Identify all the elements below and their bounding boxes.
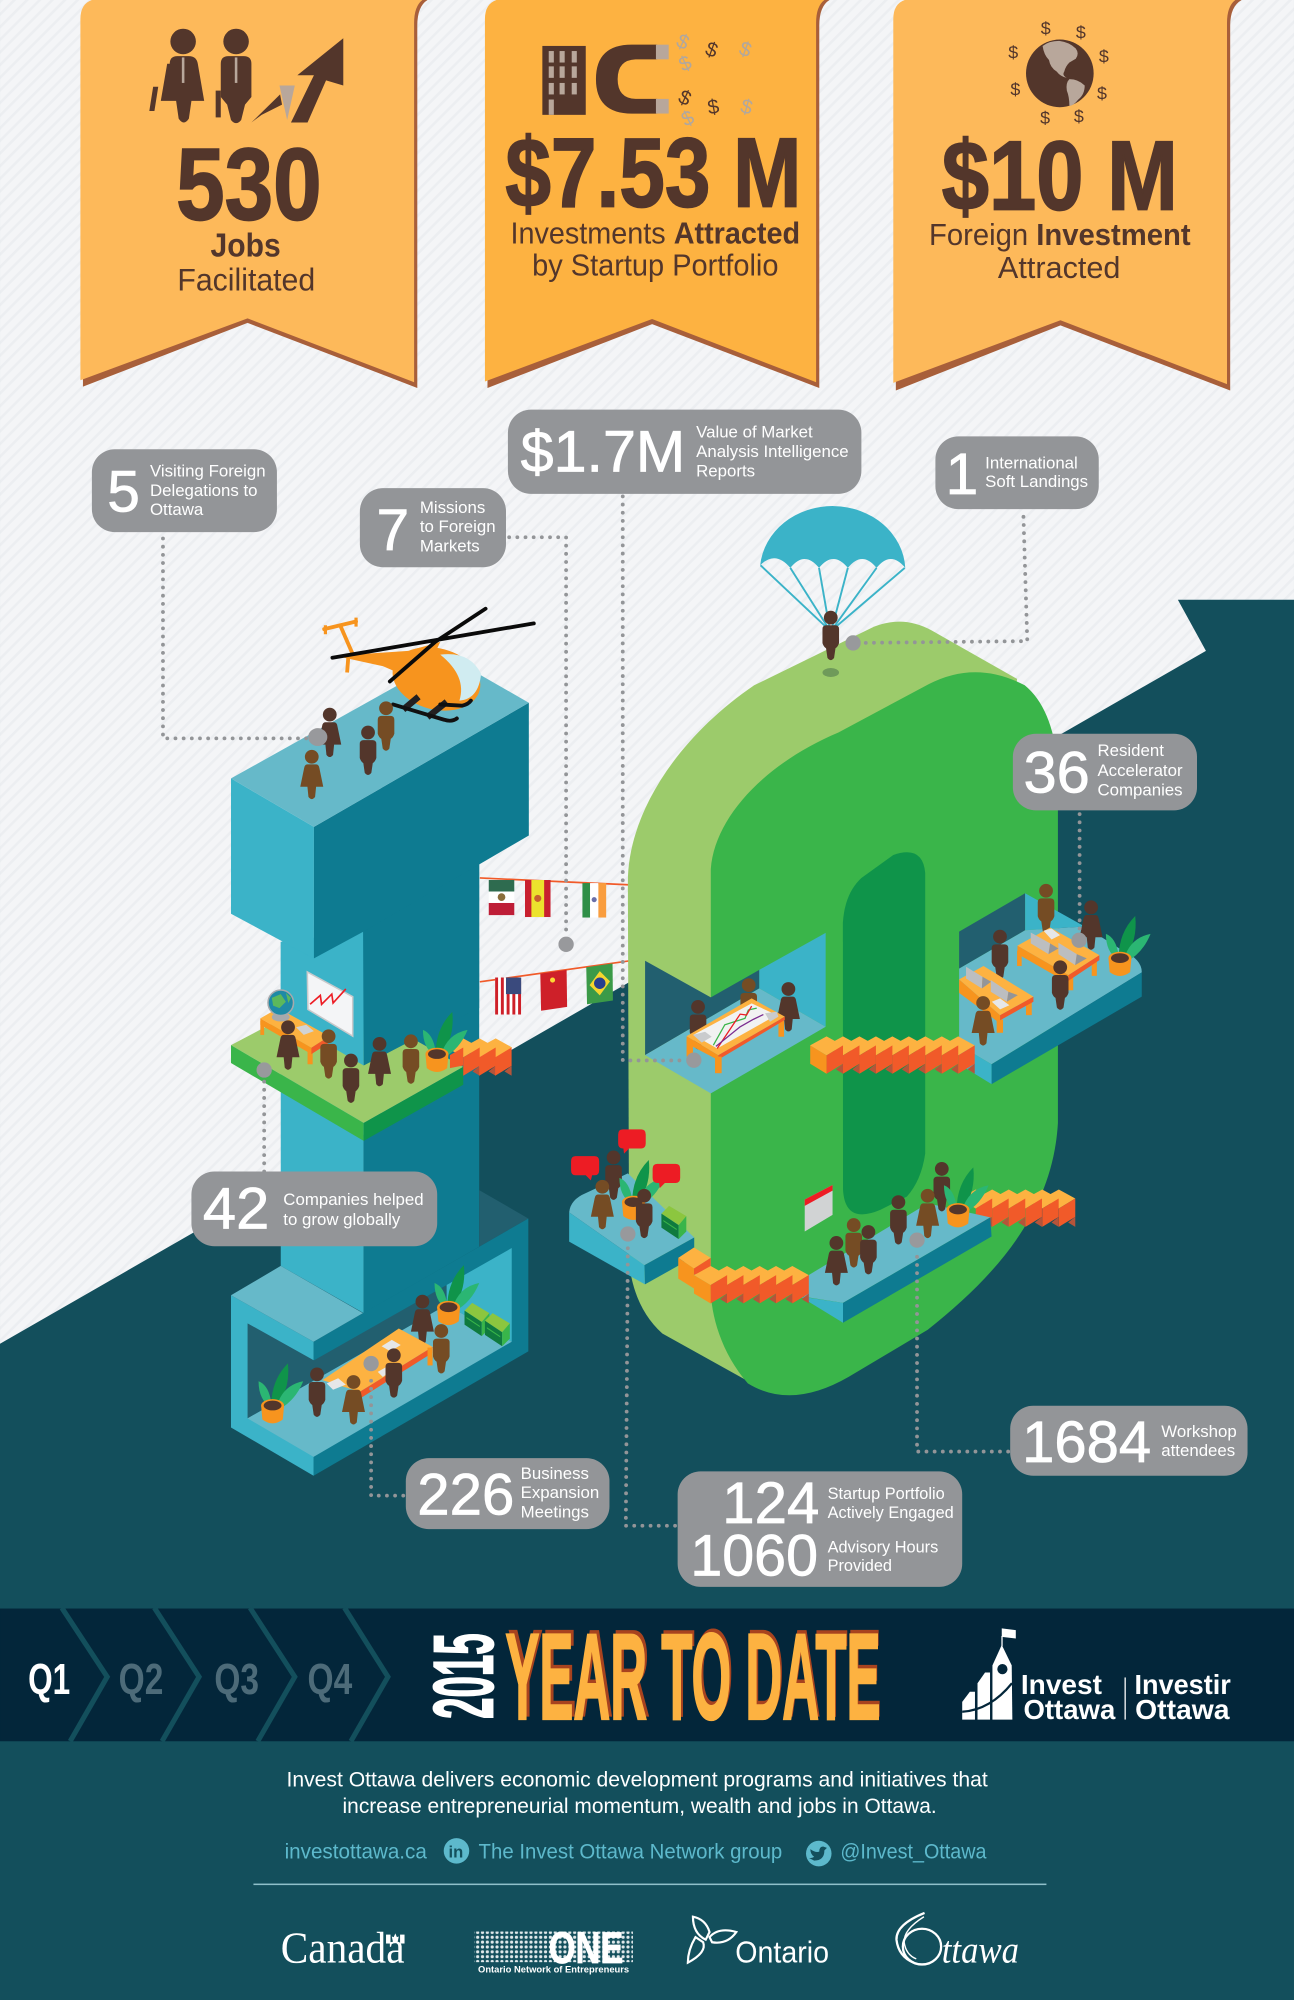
contact links: @Invest_Ottawa xyxy=(840,1841,987,1864)
callout: 7 missions: Missions xyxy=(420,498,485,517)
callout: 1 soft landing: Soft Landings xyxy=(985,472,1088,491)
quarter labels xyxy=(28,1656,352,1704)
callout: 226 meetings xyxy=(406,1458,609,1529)
callout: 36 companies: Accelerator xyxy=(1097,761,1183,780)
stairs left of workshop xyxy=(678,1248,809,1304)
callout: 1684 attendees xyxy=(1010,1406,1248,1476)
callout: 5 delegations: Delegations to xyxy=(150,481,258,500)
desk with globe xyxy=(260,990,329,1064)
stem xyxy=(281,855,479,1313)
label: investments attracted by startup portfolio: Investments Attracted xyxy=(510,217,800,251)
isometric numeral zero xyxy=(569,506,1151,1395)
logo: ONE: ONE xyxy=(549,1924,623,1973)
isometric numeral one xyxy=(231,609,534,1476)
callout: 36 companies: Resident xyxy=(1097,741,1164,760)
icon: globe with dollars: $ xyxy=(1008,43,1018,63)
callout: 1684 attendees: Workshop xyxy=(1161,1422,1237,1441)
icon: building and magnet attracting dollars: $ xyxy=(673,30,693,55)
parachute with person xyxy=(760,506,905,677)
dotted leader lines xyxy=(163,496,1080,1526)
icon: building and magnet attracting dollars xyxy=(542,30,755,131)
callout: 7 missions xyxy=(360,488,506,567)
leader end dots xyxy=(257,635,1087,1371)
zero side face xyxy=(628,622,1017,1391)
callout: 7 missions: Markets xyxy=(420,536,480,555)
callout: $1.7M: $1.7M xyxy=(521,420,685,485)
meeting table xyxy=(322,1328,433,1399)
logo: Ottawa xyxy=(896,1913,1019,1972)
callout: 42 companies: 42 xyxy=(203,1176,269,1241)
callout: 36 companies xyxy=(1013,734,1197,810)
flag: China xyxy=(540,970,567,1011)
ribbon: foreign investment xyxy=(893,0,1242,390)
icon: globe with dollars: $ xyxy=(1076,22,1086,42)
people on top of the one xyxy=(300,701,394,799)
flag: Spain xyxy=(525,880,551,917)
icon: building and magnet attracting dollars: $ xyxy=(702,38,721,63)
icon: globe with dollars: $ xyxy=(1097,84,1107,104)
icon: building and magnet attracting dollars: $ xyxy=(678,106,698,131)
person behind table xyxy=(411,1295,434,1344)
icon: globe with dollars xyxy=(1008,18,1109,128)
people at meeting table xyxy=(309,1324,450,1424)
logo: Invest Ottawa xyxy=(962,1628,1231,1725)
icon: globe with dollars: $ xyxy=(1099,47,1109,67)
callout: 226 meetings: Meetings xyxy=(521,1502,589,1521)
plant in meeting room xyxy=(435,1265,479,1325)
whiteboard with growth chart xyxy=(307,972,353,1036)
dark teal diagonal ground xyxy=(0,600,1294,2000)
label: investments attracted by startup portfolio xyxy=(510,217,800,283)
label: jobs facilitated xyxy=(177,228,315,297)
logo: Invest Ottawa: Ottawa xyxy=(1023,1694,1116,1725)
callout: 124 and 1060: Startup Portfolio xyxy=(828,1485,945,1503)
callout: 124 and 1060: 124 xyxy=(722,1471,819,1536)
contact links: investottawa.ca xyxy=(285,1841,427,1864)
icon: globe with dollars: $ xyxy=(1041,18,1051,38)
zero front face xyxy=(711,672,1058,1395)
callout: 5 delegations xyxy=(92,449,277,532)
callout: 226 meetings: 226 xyxy=(417,1462,514,1527)
networking platform xyxy=(569,1129,694,1284)
quarter labels: Q3 xyxy=(214,1656,259,1704)
callout: 124 and 1060: Provided xyxy=(828,1557,892,1575)
top bar of the one xyxy=(231,657,529,958)
icon: building and magnet attracting dollars: $ xyxy=(736,38,755,63)
icon: people and growth arrow xyxy=(149,29,343,123)
icon: building and magnet attracting dollars: $ xyxy=(675,86,695,111)
logo: Ottawa: ttawa xyxy=(942,1930,1019,1972)
ribbon: investments attracted xyxy=(485,0,829,388)
callout: 42 companies: to grow globally xyxy=(283,1210,401,1229)
icon: building and magnet attracting dollars: $ xyxy=(738,95,755,120)
callout: 1 soft landing: International xyxy=(985,453,1078,472)
callout: $1.7M: Reports xyxy=(696,462,755,481)
description text: Invest Ottawa delivers economic development programs and initiatives that xyxy=(286,1769,988,1792)
contact links: The Invest Ottawa Network group xyxy=(479,1841,782,1864)
icon: globe with dollars: $ xyxy=(1074,107,1084,127)
callout: 1 soft landing xyxy=(935,436,1099,509)
flag: United States xyxy=(495,978,521,1015)
quarter labels: Q4 xyxy=(308,1656,352,1704)
icon: linkedin xyxy=(444,1838,469,1864)
icon: building and magnet attracting dollars: $ xyxy=(676,52,696,77)
stairs right of workshop xyxy=(959,1189,1075,1227)
callout: 5 delegations: Visiting Foreign xyxy=(150,462,266,481)
zero inner hole xyxy=(843,852,925,1214)
label: foreign investment attracted: Attracted xyxy=(998,251,1120,285)
callout: 1684 attendees: 1684 xyxy=(1022,1410,1151,1475)
callout: 124 and 1060: 1060 xyxy=(690,1523,818,1588)
big number $10 M: $10 M xyxy=(942,120,1178,230)
callout: 1 soft landing: 1 xyxy=(946,442,978,507)
logo: Ontario: Ontario xyxy=(735,1936,829,1970)
callout: 124 and 1060: Actively Engaged xyxy=(828,1504,954,1522)
plant on platform xyxy=(423,1012,468,1072)
ribbon: jobs xyxy=(80,0,428,388)
big number 530: 530 xyxy=(176,127,322,241)
quarter labels: Q1 xyxy=(28,1656,70,1704)
stairs across zero hole xyxy=(810,1036,975,1074)
accelerator room xyxy=(959,884,1151,1084)
callout: $1.7M: Analysis Intelligence xyxy=(696,442,849,461)
callout: 124 and 1060: Advisory Hours xyxy=(828,1538,938,1556)
callout: 42 companies: Companies helped xyxy=(283,1190,424,1209)
logo: Ontario xyxy=(688,1917,829,1970)
callout: $1.7M: Value of Market xyxy=(696,423,813,442)
icon: twitter xyxy=(806,1841,832,1866)
analysis room xyxy=(645,933,826,1093)
description text: increase entrepreneurial momentum, wealth and jobs in Ottawa. xyxy=(343,1795,937,1818)
callout: 124 and 1060 xyxy=(678,1471,962,1588)
big number $7.53 M: $7.53 M xyxy=(505,118,801,228)
callout: 5 delegations: 5 xyxy=(107,460,140,525)
logo: ONE xyxy=(474,1924,633,1975)
flag: Mexico xyxy=(489,880,514,915)
callout: 42 companies xyxy=(191,1171,437,1246)
label: foreign investment attracted: Foreign Investment xyxy=(929,218,1191,252)
workshop platform xyxy=(800,1162,992,1323)
label: investments attracted by startup portfolio: by Startup Portfolio xyxy=(532,249,778,283)
callout: 1684 attendees: attendees xyxy=(1161,1441,1235,1460)
flag: Brazil xyxy=(586,963,613,1004)
flag: India xyxy=(582,883,606,918)
logo: ONE: Ontario Network of Entrepreneurs xyxy=(478,1965,629,1975)
callout: 5 delegations: Ottawa xyxy=(150,500,204,519)
label: jobs facilitated: Facilitated xyxy=(177,261,315,297)
icon: globe with dollars: $ xyxy=(1040,108,1050,128)
quarter labels: Q2 xyxy=(119,1656,163,1704)
logo: Invest Ottawa: Investir xyxy=(1134,1669,1231,1700)
calendar xyxy=(805,1185,833,1231)
heading: year to date xyxy=(505,1605,881,1745)
green platform xyxy=(231,993,463,1141)
base with meeting room xyxy=(231,1190,528,1476)
speech bubbles xyxy=(571,1129,680,1188)
year to date banner xyxy=(0,1605,1294,1745)
year to date banner: 2015 xyxy=(417,1633,511,1719)
desks with laptops xyxy=(959,927,1099,1033)
filing cabinets xyxy=(465,1303,510,1346)
helicopter xyxy=(324,609,534,721)
icon: building and magnet attracting dollars: $ xyxy=(706,96,722,119)
label: jobs facilitated: Jobs xyxy=(211,228,281,265)
description text xyxy=(286,1769,988,1818)
callout: 226 meetings: Expansion xyxy=(521,1483,599,1502)
contact links xyxy=(285,1838,987,1866)
logo: Invest Ottawa: Invest xyxy=(1021,1669,1102,1700)
flags xyxy=(480,878,666,1015)
icon: linkedin: in xyxy=(449,1842,463,1861)
callout: 7 missions: to Foreign xyxy=(420,517,496,536)
callout: 36 companies: 36 xyxy=(1023,740,1090,805)
callout: $1.7M xyxy=(508,410,861,494)
logo: Invest Ottawa: Ottawa xyxy=(1135,1694,1230,1725)
analysis table with chart xyxy=(687,998,785,1073)
callout: 7 missions: 7 xyxy=(376,498,409,563)
label: foreign investment attracted xyxy=(929,218,1191,285)
people on platform xyxy=(277,1020,419,1103)
quarter chevrons xyxy=(62,1608,388,1741)
logo: Canada: Canada xyxy=(281,1923,405,1973)
callout: 36 companies: Companies xyxy=(1097,781,1183,800)
plant front of room xyxy=(259,1363,303,1423)
stairs from platform xyxy=(447,1038,512,1076)
callout: 226 meetings: Business xyxy=(521,1464,589,1483)
upper stem above platform xyxy=(281,863,479,1066)
icon: globe with dollars: $ xyxy=(1010,80,1020,100)
